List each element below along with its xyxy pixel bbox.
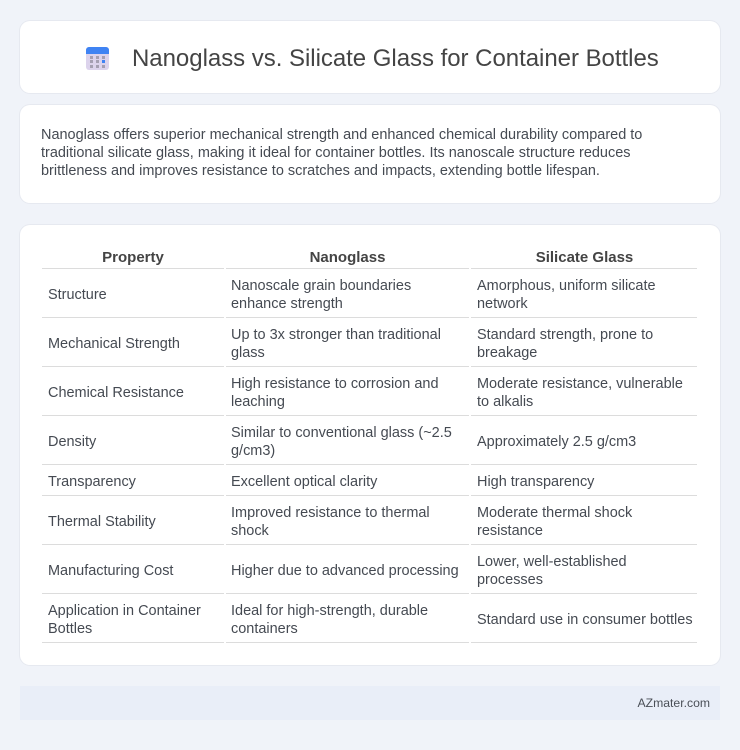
summary paragraph: Nanoglass offers superior mechanical strength and enhanced chemical durability compared to bbox=[41, 127, 642, 143]
row: chemical resistance bbox=[48, 376, 683, 410]
row: manufacturing cost: Manufacturing Cost bbox=[48, 563, 173, 579]
panel: summary text bbox=[20, 105, 720, 203]
row: transparency: High transparency bbox=[477, 474, 594, 490]
row: density: Density bbox=[48, 434, 96, 450]
row: mechanical strength bbox=[48, 327, 653, 361]
row: density: Approximately 2.5 g/cm3 bbox=[477, 434, 636, 450]
row: application in container bottles: Ideal for high-strength, durable bbox=[231, 603, 428, 619]
row: chemical resistance: leaching bbox=[231, 394, 285, 410]
summary paragraph: brittleness and improves resistance to scratches and impacts, extending bottle lifespan. bbox=[41, 163, 600, 179]
title: Nanoglass vs. Silicate Glass for Container Bottles bbox=[132, 45, 659, 72]
row: manufacturing cost: processes bbox=[477, 572, 543, 588]
row: transparency: Excellent optical clarity bbox=[231, 474, 377, 490]
row: structure: Structure bbox=[48, 287, 107, 303]
row: application in container bottles: Application in Container bbox=[48, 603, 201, 619]
summary paragraph: traditional silicate glass, making it ideal for container bottles. Its nanoscale structure reduces bbox=[41, 145, 630, 161]
row: density: Similar to conventional glass (~2.5 bbox=[231, 425, 452, 441]
row: structure bbox=[48, 278, 656, 312]
row: mechanical strength: glass bbox=[231, 345, 265, 361]
row: transparency bbox=[48, 474, 594, 490]
row: transparency: Transparency bbox=[48, 474, 136, 490]
row: structure: enhance strength bbox=[231, 296, 343, 312]
panel: comparison table bbox=[20, 225, 720, 665]
icon: calendar bbox=[86, 47, 109, 70]
table header: Silicate Glass bbox=[536, 249, 633, 266]
panel: title card bbox=[20, 21, 720, 93]
row: thermal stability: shock bbox=[231, 523, 269, 539]
row: structure: Amorphous, uniform silicate bbox=[477, 278, 656, 294]
row: application in container bottles: Standard use in consumer bottles bbox=[477, 612, 693, 628]
summary paragraph bbox=[41, 127, 642, 179]
row: thermal stability: resistance bbox=[477, 523, 543, 539]
footer credit: AZmater.com bbox=[638, 696, 710, 710]
table header: Property bbox=[102, 249, 164, 266]
row: application in container bottles: Bottles bbox=[48, 621, 92, 637]
row: thermal stability: Moderate thermal shock bbox=[477, 505, 632, 521]
row: mechanical strength: Standard strength, prone to bbox=[477, 327, 653, 343]
row: application in container bottles: containers bbox=[231, 621, 298, 637]
row: application in container bottles bbox=[48, 603, 693, 637]
row: density: g/cm3) bbox=[231, 443, 275, 459]
row: manufacturing cost bbox=[48, 554, 627, 588]
table header: Nanoglass bbox=[310, 249, 385, 266]
row: mechanical strength: Mechanical Strength bbox=[48, 336, 180, 352]
row: structure: Nanoscale grain boundaries bbox=[231, 278, 411, 294]
row: thermal stability bbox=[48, 505, 632, 539]
row: chemical resistance: Chemical Resistance bbox=[48, 385, 184, 401]
footer bar bbox=[20, 686, 720, 720]
row: chemical resistance: Moderate resistance, vulnerable bbox=[477, 376, 683, 392]
row: structure: network bbox=[477, 296, 528, 312]
table header bbox=[102, 249, 633, 266]
row: manufacturing cost: Lower, well-established bbox=[477, 554, 627, 570]
row: chemical resistance: to alkalis bbox=[477, 394, 533, 410]
row: manufacturing cost: Higher due to advanced processing bbox=[231, 563, 459, 579]
row: chemical resistance: High resistance to corrosion and bbox=[231, 376, 438, 392]
row: thermal stability: Thermal Stability bbox=[48, 514, 156, 530]
row: mechanical strength: Up to 3x stronger than traditional bbox=[231, 327, 441, 343]
row: mechanical strength: breakage bbox=[477, 345, 537, 361]
row: density bbox=[48, 425, 636, 459]
row: thermal stability: Improved resistance to thermal bbox=[231, 505, 430, 521]
